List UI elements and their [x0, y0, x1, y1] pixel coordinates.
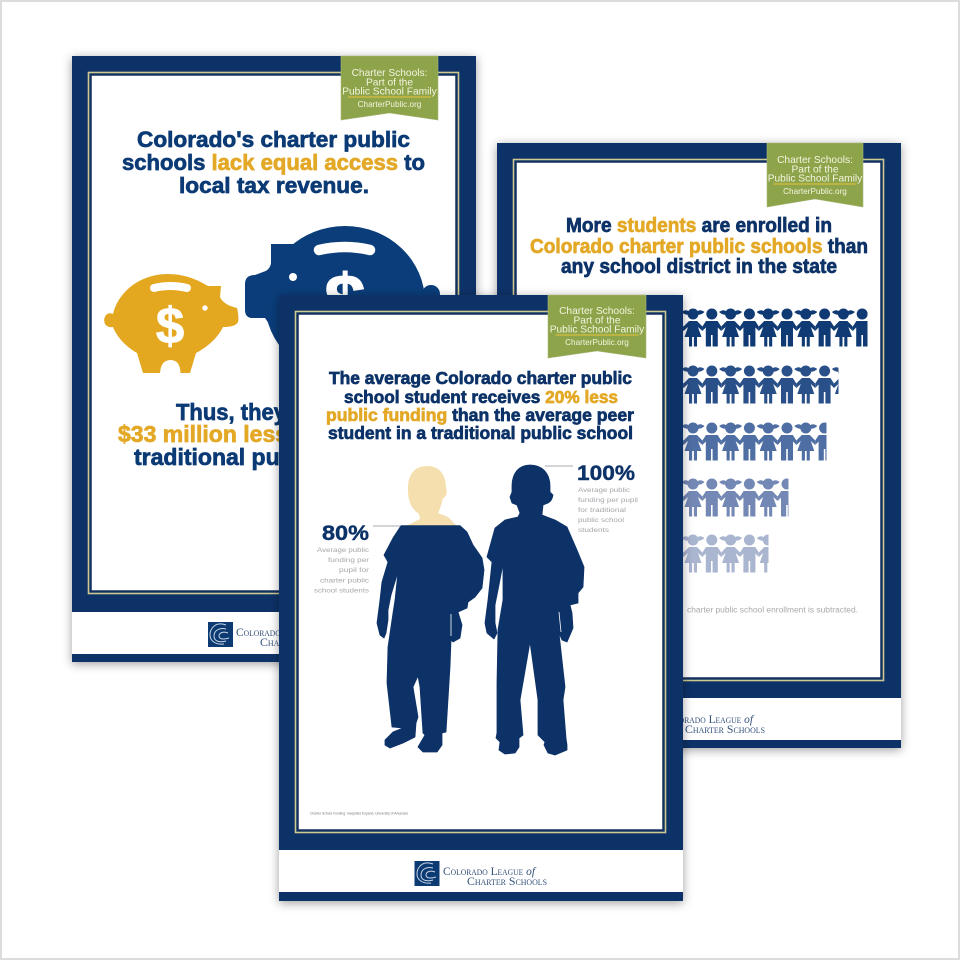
conclusion text: $33 million less	[118, 421, 288, 447]
conclusion text: traditional public	[134, 444, 319, 470]
heading	[530, 215, 868, 278]
ribbon badge	[767, 143, 863, 207]
ribbon badge: Part of the	[573, 316, 621, 326]
poster frame	[497, 143, 901, 748]
ribbon badge: Charter Schools:	[352, 68, 427, 79]
heading	[122, 127, 425, 198]
ribbon badge: Charter Schools:	[777, 155, 853, 166]
heading: Colorado's charter public	[137, 127, 410, 152]
heading: schools lack equal access to	[122, 150, 425, 175]
callout: 80 percent: funding per	[328, 557, 369, 564]
callout: 100 percent	[545, 462, 638, 534]
conclusion text: Thus, they	[176, 399, 286, 425]
heading: Colorado charter public schools than	[530, 236, 868, 258]
ribbon badge: CharterPublic.org	[565, 338, 629, 347]
callout: 80 percent: pupil for	[339, 567, 369, 574]
heading: any school district in the state	[561, 256, 837, 278]
chart: traditional student silhouette at 100%	[485, 465, 584, 755]
callout: 100 percent: funding per pupil	[578, 497, 638, 504]
logo: Colorado League	[661, 712, 765, 736]
ribbon badge: Public School Family	[550, 324, 645, 336]
poster frame	[279, 295, 683, 901]
ribbon badge	[341, 56, 438, 120]
logo: Colorado League	[208, 622, 340, 649]
logo: Colorado League: Charter Schools	[685, 722, 765, 736]
logo: Colorado League: Charter Schools	[467, 874, 547, 888]
callout: 100 percent: students	[578, 527, 609, 534]
row 5	[683, 534, 768, 572]
chart: charter student silhouette filled to 80%	[377, 466, 484, 752]
poster frame	[72, 56, 476, 662]
logo: Colorado League	[414, 861, 547, 888]
callout: 100 percent: Average public	[578, 487, 630, 494]
callout: 80 percent: school students	[314, 588, 369, 594]
ribbon badge: Part of the	[791, 164, 839, 176]
ribbon badge: Part of the	[366, 78, 413, 88]
callout: 100 percent: for traditional	[578, 507, 626, 514]
logo: Colorado League: Colorado League of	[443, 864, 537, 878]
panel: poster on student enrollment	[497, 143, 901, 748]
source note: Charter School Funding: Inequities Expand, University of Arkansas	[310, 812, 408, 816]
heading: The average Colorado charter public	[329, 368, 632, 388]
ribbon badge: Charter Schools:	[559, 306, 635, 317]
row 3	[683, 422, 826, 460]
heading: public funding than the average peer	[326, 405, 634, 425]
pictogram chart: rows of students by enrollment	[683, 308, 868, 572]
icon: gold piggy bank	[104, 274, 238, 373]
callout: 80 percent: charter public	[320, 578, 369, 584]
row 1: charter enrollment	[683, 308, 868, 346]
ribbon badge: CharterPublic.org	[783, 187, 847, 196]
callout: 80 percent: 80%	[322, 522, 369, 545]
heading: local tax revenue.	[179, 173, 369, 198]
ribbon badge	[548, 295, 646, 358]
logo: Colorado League: Charter Schools	[260, 635, 340, 649]
row 2	[683, 366, 838, 404]
icon: gold piggy bank: $	[156, 297, 184, 354]
panel: poster on per pupil funding	[279, 295, 683, 901]
heading: student in a traditional public school	[328, 423, 633, 443]
callout: 80 percent	[314, 522, 400, 594]
conclusion text	[118, 399, 319, 470]
ribbon badge: Public School Family	[342, 86, 438, 98]
panel: poster on local tax revenue	[72, 56, 476, 662]
logo: Colorado League: Colorado League of	[236, 625, 330, 639]
row 4	[683, 478, 788, 516]
heading: More students are enrolled in	[566, 215, 832, 237]
logo: Colorado League: Colorado League of	[661, 712, 755, 726]
ribbon badge: Public School Family	[768, 174, 863, 184]
callout: 80 percent: Average public	[317, 547, 369, 554]
heading	[326, 368, 634, 443]
ribbon badge: CharterPublic.org	[358, 100, 422, 109]
icon: blue piggy bank: $	[324, 259, 366, 343]
callout: 100 percent: public school	[578, 517, 624, 524]
heading: school student receives 20% less	[344, 387, 618, 407]
footnote: charter public school enrollment is subtracted.	[687, 606, 858, 614]
icon: blue piggy bank	[245, 226, 440, 378]
callout: 100 percent: 100%	[577, 462, 635, 485]
